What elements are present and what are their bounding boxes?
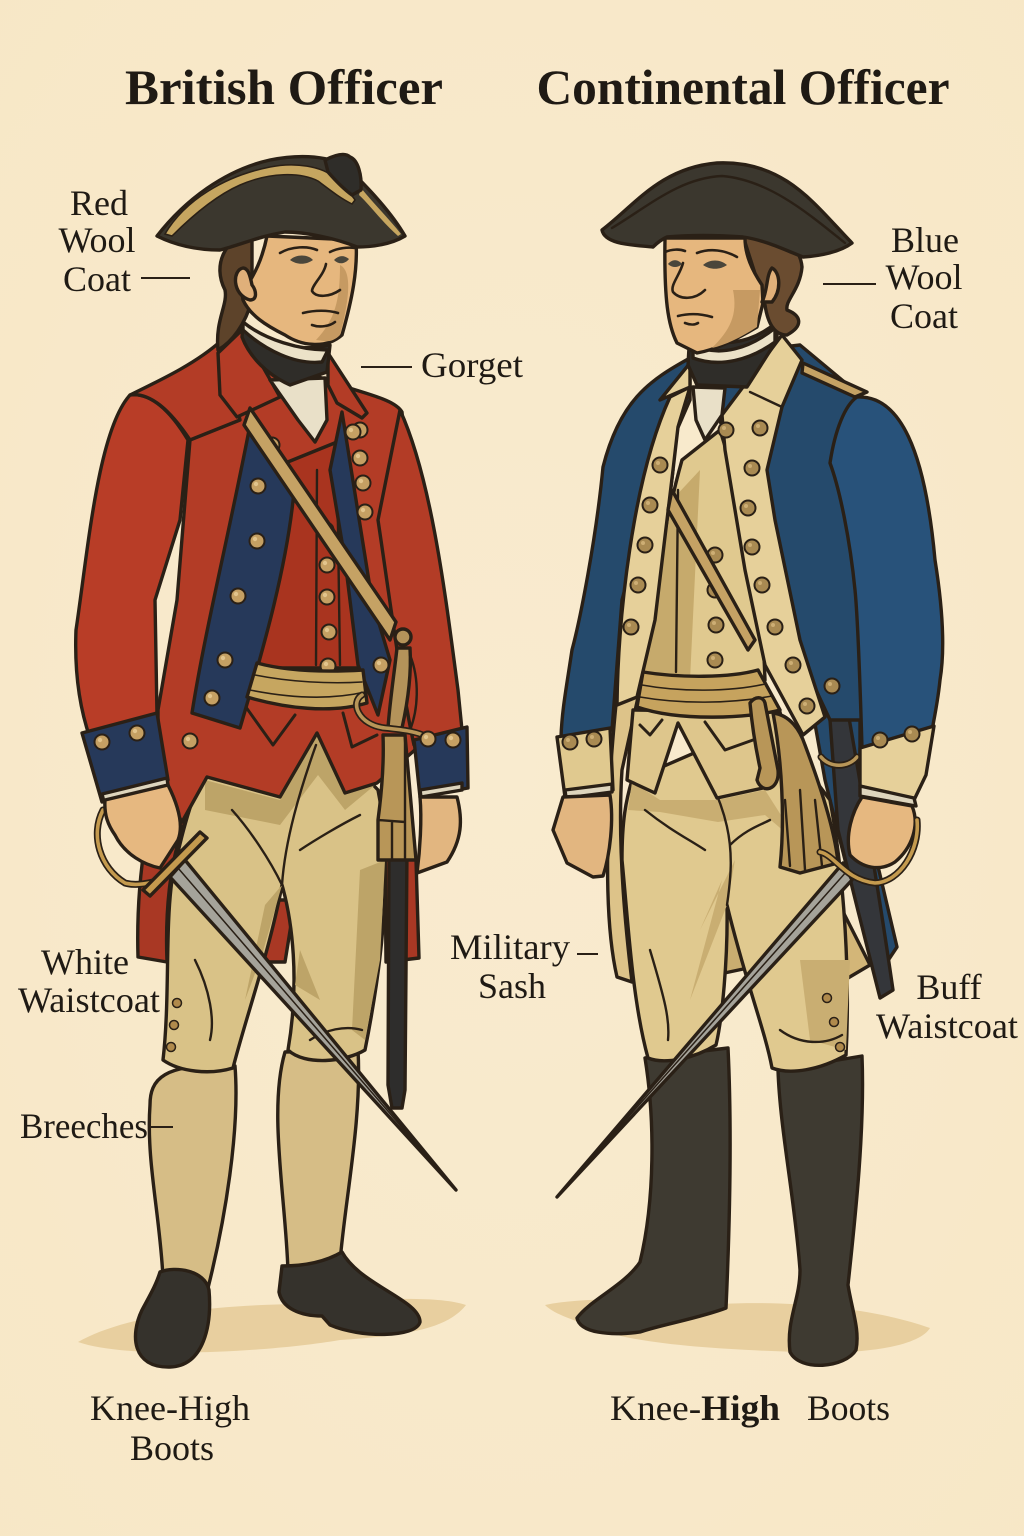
scabbard [828, 688, 893, 998]
tassel fringes [785, 790, 822, 870]
label: Knee-High Boots right: Knee-High [610, 1388, 780, 1428]
title: Continental Officer: Continental Officer [536, 59, 950, 115]
cuff right [860, 726, 934, 806]
pommel [395, 629, 411, 645]
cuff left [82, 713, 168, 802]
coat body [158, 340, 424, 822]
label: White Waistcoat [18, 942, 160, 1020]
buff coat tail between legs [715, 905, 748, 975]
scabbard [388, 850, 407, 1108]
sword hook on sash [750, 698, 778, 789]
label: Red Wool Coat: Coat [63, 259, 131, 299]
label: Buff Waistcoat: Waistcoat [876, 1006, 1018, 1046]
buff waistcoat [640, 430, 765, 680]
waistcoat pocket skirts [627, 710, 790, 798]
sword knot wires [410, 655, 417, 730]
buff left lapel [617, 387, 690, 705]
sash [637, 670, 780, 717]
label: Military Sash: Military [450, 927, 570, 967]
waistcoat placket [316, 460, 340, 665]
blade fuller [178, 868, 456, 1190]
label: White Waistcoat: White [41, 942, 129, 982]
waistcoat placket [676, 490, 678, 672]
sword guard on sash [357, 695, 427, 737]
Continental tricorn hat [602, 163, 852, 257]
knuckle bow inner [97, 810, 165, 884]
label: Blue Wool Coat: Wool [885, 257, 963, 297]
breeches folds and knee buttons [645, 725, 844, 1052]
right blue sleeve [830, 397, 943, 748]
sword guard [143, 832, 207, 896]
blade fuller [557, 871, 847, 1197]
label: Knee-High Boots left: Knee-High [90, 1388, 250, 1428]
label: Buff Waistcoat: Buff [916, 967, 982, 1007]
sword blade [557, 863, 852, 1197]
label: Blue Wool Coat: Blue [891, 220, 959, 260]
ground shadow [545, 1300, 930, 1353]
shoulder strap [668, 490, 755, 650]
collar fold [750, 392, 782, 407]
label: Buff Waistcoat [876, 967, 1018, 1046]
breeches shading [205, 735, 385, 1040]
left hand [553, 795, 612, 877]
scabbard ring inner [821, 757, 857, 765]
shoulder strap [244, 408, 396, 640]
left blue sleeve [561, 358, 690, 737]
head [665, 235, 802, 353]
breeches [163, 725, 385, 1072]
right sleeve [378, 410, 462, 745]
head [218, 232, 356, 350]
tassel band [378, 735, 405, 860]
label: Gorget: Gorget [421, 345, 523, 385]
label: Blue Wool Coat: Coat [890, 296, 958, 336]
brass buttons [182, 392, 388, 748]
sword blade [170, 860, 456, 1190]
shoulder seam left [130, 340, 240, 440]
label: Knee-High Boots right [610, 1388, 890, 1428]
figure: British officer [76, 154, 468, 1367]
red waistcoat [250, 440, 378, 668]
neck and cravat [688, 322, 777, 440]
breeches [622, 720, 847, 1071]
shoes [135, 1252, 420, 1367]
blue coat body [690, 345, 864, 720]
buff coat tail right [832, 890, 870, 978]
label: White Waistcoat: Waistcoat [18, 980, 160, 1020]
waistcoat shading and placket [643, 470, 700, 680]
tassel [378, 735, 416, 860]
right hand [417, 797, 460, 873]
buff right lapel [722, 335, 825, 735]
scabbard ring [821, 757, 857, 765]
red coat left skirt [138, 780, 185, 962]
sword grip and pommel [388, 648, 410, 728]
label: Knee-High Boots left [90, 1388, 250, 1468]
left coat facing strip [608, 470, 673, 982]
neck and cravat [242, 322, 330, 442]
knuckle bow inner [820, 820, 917, 883]
label: Military Sash [450, 927, 598, 1006]
label: Breeches: Breeches [20, 1106, 148, 1146]
navy lapel right [330, 412, 390, 715]
blue coat tail [800, 600, 897, 965]
collar and facings [218, 330, 280, 417]
pocket flaps [243, 703, 377, 747]
pocket flap lines [640, 720, 753, 750]
boots [577, 1048, 863, 1365]
sash tassel [773, 713, 838, 873]
buff collar left [660, 363, 690, 400]
figure: Continental officer [545, 163, 943, 1365]
sash [247, 663, 367, 709]
breeches folds and knee buttons [166, 745, 362, 1052]
left sleeve [76, 395, 188, 738]
label: Knee-High Boots left: Boots [130, 1428, 214, 1468]
label: Blue Wool Coat [823, 220, 963, 336]
coat tail right [385, 855, 419, 962]
cuff right [414, 727, 468, 797]
British tricorn hat [157, 154, 405, 250]
cuff left [557, 728, 613, 798]
navy lapel left [192, 425, 295, 728]
gold epaulette strip [802, 363, 867, 397]
label: Military Sash: Sash [478, 966, 546, 1006]
label: Red Wool Coat: Red [70, 183, 128, 223]
stockings [149, 1050, 359, 1288]
label: Red Wool Coat: Wool [58, 220, 136, 260]
coat tail between legs [250, 900, 295, 962]
label: Knee-High Boots right: Boots [807, 1388, 890, 1428]
sword guard inner [357, 695, 427, 737]
breeches shading [628, 782, 850, 1050]
knuckle bow [97, 810, 165, 884]
label: Red Wool Coat [58, 183, 190, 299]
title: British Officer: British Officer [125, 59, 443, 115]
ground shadow [78, 1299, 466, 1353]
left hand [105, 785, 180, 868]
sash folds [640, 684, 772, 702]
knuckle bow [820, 820, 917, 883]
right hand [848, 797, 915, 868]
brass buttons [624, 420, 840, 714]
sash folds [250, 675, 365, 697]
